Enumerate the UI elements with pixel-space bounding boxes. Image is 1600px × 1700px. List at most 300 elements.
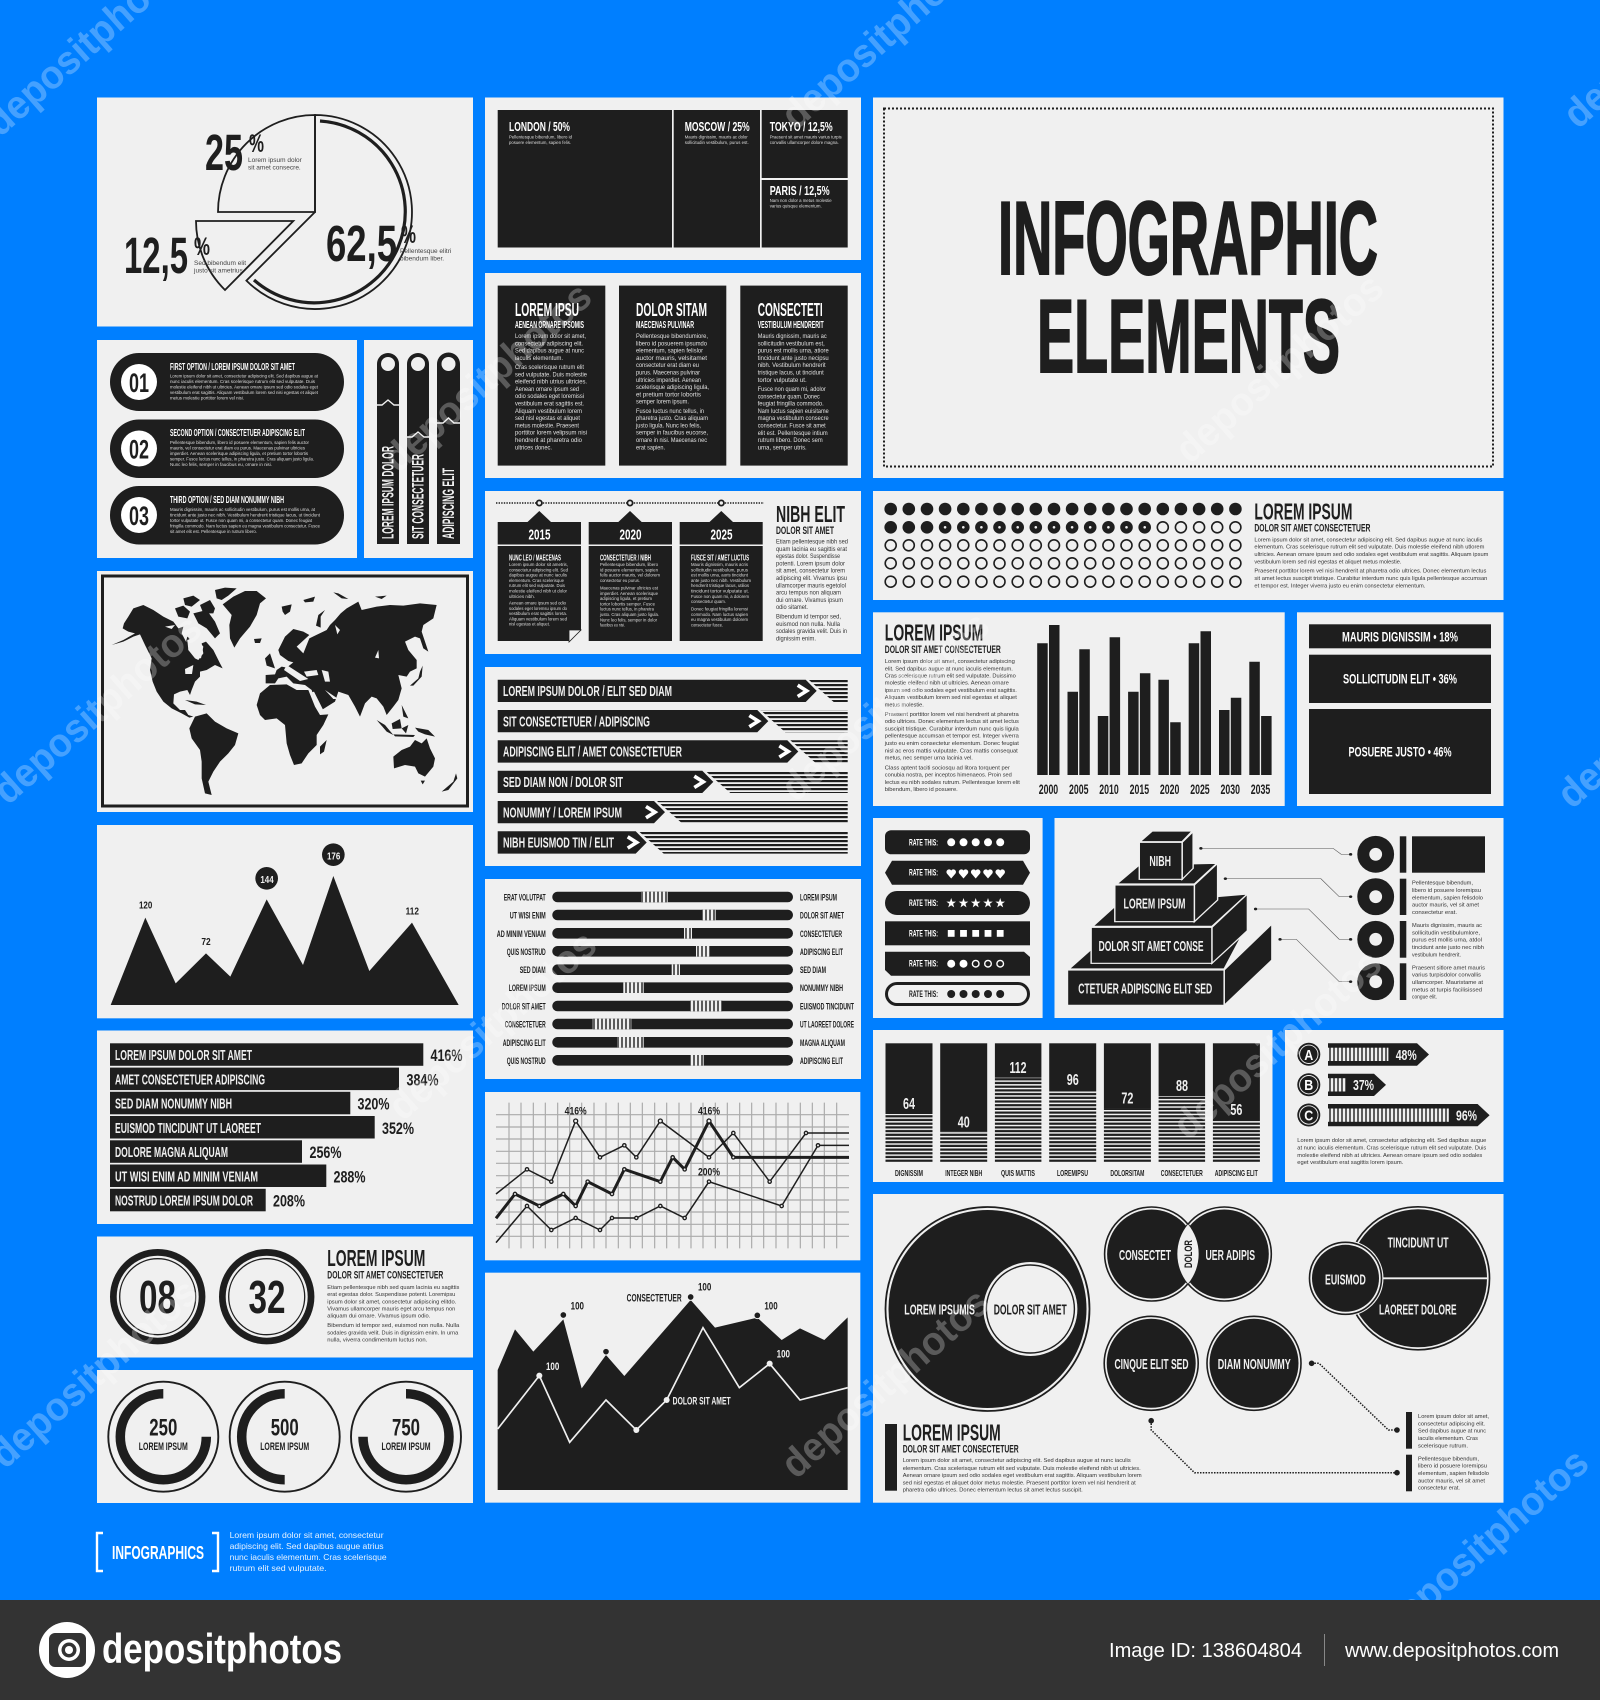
card dolor sitam: purus. Maecenas pulvinar	[636, 370, 701, 376]
slider right labels: EUISMOD TINCIDUNT	[800, 1002, 854, 1012]
option 03: tortor vulputate ut. Fusce non quam mi, a consectetur quam. Donec feugiat	[170, 518, 313, 524]
venn text block: Aenean ornare ipsum sed odio sodales eget vestibulum erat sagittis. Aliquam vestibulum lorem	[903, 1473, 1142, 1479]
arrow row 1: LOREM IPSUM DOLOR / ELIT SED DIAM	[503, 683, 672, 700]
dot matrix text block: Praesent porttitor lorem vel nisi hendrerit at pharetra odio ultrices. Donec elementum lectus	[1254, 569, 1486, 575]
panel: pie chart	[97, 98, 473, 326]
slider hatches	[593, 892, 722, 1066]
area chart labels: DOLOR SIT AMET	[673, 1395, 731, 1407]
slider right labels: MAGNA ALIQUAM	[800, 1038, 845, 1049]
timeline card 2020: 2020	[620, 526, 642, 544]
circle diam: DIAM NONUMMY	[1218, 1356, 1291, 1373]
pyramid notes: sollicitudin vestibulumlore,	[1412, 930, 1480, 936]
overlapping circles	[1105, 1207, 1271, 1301]
line chart labels: 416%	[698, 1106, 720, 1118]
slider right labels: CONSECTETUER	[800, 929, 842, 940]
timeline card 2020: CONSECTETUER / NIBH	[600, 554, 651, 562]
card dolor sitam: pharetra justo. Cras aliquam	[636, 415, 708, 422]
row B: B	[1304, 1077, 1313, 1094]
card lorem ipsu: AENEAN ORNARE IPSOMIS	[515, 320, 584, 331]
panel: venn diagrams	[873, 1194, 1504, 1503]
tab lorem ipsum dolor: LOREM IPSUM DOLOR	[378, 446, 398, 539]
timeline card 2025: hendrerit tristique lacus, utilios	[691, 583, 750, 588]
card dolor sitam: consectetur erat diam eu	[636, 362, 699, 369]
bar values	[273, 1046, 462, 1210]
ring text block: Vivamus ullamcorper mauris eget arcu tempus non	[327, 1306, 455, 1312]
slider right labels: UT LAOREET DOLORE	[800, 1020, 854, 1030]
stock watermarks: depositphotos	[380, 922, 605, 1129]
dotted connector upper	[1309, 1360, 1400, 1433]
footer bar	[0, 1600, 1600, 1700]
row A	[1297, 1043, 1429, 1066]
circle cinque	[1104, 1316, 1198, 1410]
timeline card 2015: 2015	[528, 526, 550, 544]
bar labels: AMET CONSECTETUER ADIPISCING	[115, 1071, 265, 1088]
option 01	[110, 353, 344, 411]
card lorem ipsu: ultrices donec.	[515, 444, 552, 451]
timeline card 2025: consectetur quam.	[691, 599, 726, 604]
arrow row 4: SED DIAM NON / DOLOR SIT	[503, 774, 623, 791]
venn note lower: libero id posuere loremipsu	[1418, 1464, 1487, 1470]
card lorem ipsu: Aenean ornare ipsum sed	[515, 386, 579, 393]
card lorem ipsu: metus molestie. Praesent	[515, 422, 579, 429]
bar labels: DOLORE MAGNA ALIQUAM	[115, 1144, 228, 1161]
line chart labels: 416%	[565, 1106, 587, 1118]
ring text block: nulla, viverra condimentum luctus non.	[327, 1338, 428, 1344]
split circle	[1308, 1207, 1490, 1350]
column chart text block: molestie eleifend nibh ut ultricies. Aenean ornare	[885, 680, 1009, 686]
timeline card 2025: consectetur fusce.	[691, 622, 723, 627]
panel: column pair chart	[873, 612, 1285, 806]
slider right labels: NONUMMY NIBH	[800, 983, 843, 994]
city london	[498, 110, 672, 248]
venn note upper: consectetur adipiscing elit.	[1418, 1421, 1485, 1427]
option 01: 01	[129, 368, 149, 398]
data markers	[536, 1294, 773, 1433]
peak labels: 72	[201, 937, 211, 948]
panel: range sliders	[485, 879, 861, 1079]
card dolor sitam: ultricies imperdiet. Aenean	[636, 377, 701, 384]
split circle: LAOREET DOLORE	[1379, 1301, 1456, 1318]
panel: gauges	[97, 1370, 473, 1503]
line chart labels: 200%	[698, 1166, 720, 1178]
map continents	[112, 588, 457, 795]
pyramid notes: purus est mollis urna, atdol	[1412, 938, 1482, 944]
rating row squares: RATE THIS:	[909, 928, 938, 938]
ring 32	[219, 1249, 314, 1344]
option 01: metus molestie porttitor lorem vel nisi.	[170, 396, 244, 402]
column year labels: 2020	[1160, 781, 1180, 797]
column chart text block: suscipit tristique. Curabitur interdum nunc quis ligula	[885, 726, 1019, 732]
bar values: 416%	[430, 1046, 462, 1065]
slider left labels: CONSECTETUER	[505, 1020, 546, 1030]
timeline card 2025: ante justo nec nibh. Vestibulum	[691, 578, 751, 583]
column pairs	[1037, 625, 1272, 775]
arrow row 3: ADIPISCING ELIT / AMET CONSECTETUER	[503, 744, 682, 761]
card consecteti: tincidunt ante justo necipsu	[758, 355, 829, 362]
venn text block: Lorem ipsum dolor sit amet, consectetur adipiscing elit. Sed dapibus augue at nunc iaculis	[903, 1458, 1131, 1464]
column captions: DOLORSITAM	[1110, 1168, 1144, 1178]
gauge 500: LOREM IPSUM	[260, 1441, 309, 1453]
timeline card 2020: imperdiet. Aenean scelerisque	[600, 591, 658, 596]
pie slice 25 percent	[218, 115, 315, 212]
timeline card 2015: vestibulum erat sagittis loreta.	[509, 611, 567, 616]
venn text block: pharetra odio ultrices. Donec elementum lectus sit amet lectus suscipit.	[903, 1488, 1083, 1494]
gauge 250	[108, 1382, 218, 1492]
column chart text block: Cras scelerisque rutrum elit sed vulputate. Duissimo	[885, 673, 1016, 679]
gauge 750	[351, 1382, 461, 1492]
footer image id: Image ID: 138604804	[1109, 1639, 1302, 1662]
block 36 percent: SOLLICITUDIN ELIT • 36%	[1343, 670, 1457, 686]
column values: 64	[903, 1096, 915, 1113]
card dolor sitam: libero id posuerem ipsumdo	[636, 340, 707, 347]
row A: A	[1304, 1047, 1313, 1064]
ring text block: sodales gravida velit. Duis in dignissim enim. In urna	[327, 1330, 459, 1336]
card consecteti: consectetur quam. Donec	[758, 393, 820, 400]
timeline text block: potenti. Lorem ipsum dolor	[776, 560, 845, 567]
timeline card 2025	[680, 511, 763, 641]
timeline card 2020: tortor lobortis semper. Fusce	[600, 601, 655, 606]
timeline card 2020: id posuere elementum, sapien	[600, 567, 658, 572]
overlapping circles: CONSECTET	[1119, 1247, 1171, 1264]
label 12.5 percent: justo sit ametrius.	[193, 268, 245, 274]
area chart labels: 100	[698, 1282, 711, 1294]
series 1	[496, 1119, 849, 1194]
series 2 thick	[496, 1119, 849, 1218]
bar values: 288%	[334, 1167, 366, 1186]
timeline text block: sit amet, consectetur lorem	[776, 568, 845, 575]
area chart labels: CONSECTETUER	[627, 1292, 682, 1304]
timeline card 2015: molestie eleifend nibh ut dolor	[509, 588, 567, 594]
label 25 percent: sit amet consecre.	[248, 164, 301, 172]
bar labels: LOREM IPSUM DOLOR SIT AMET	[115, 1047, 252, 1064]
option 02: imperdiet. Aenean scelerisque adipiscing ligula, et pretium tortor lobortis	[170, 451, 309, 457]
timeline card 2025: eu magna vestibulum dolorem	[691, 617, 748, 622]
column chart text block: elit. Sed dapibus augue at nunc iaculis elementum.	[885, 666, 1013, 672]
area chart labels	[546, 1282, 790, 1407]
card dolor sitam: ornare in nisi. Maecenas nec	[636, 437, 708, 444]
option 03: 03	[129, 501, 149, 531]
bar values: 384%	[406, 1070, 438, 1089]
overlapping circles: UER ADIPIS	[1206, 1247, 1255, 1264]
large nested circle: DOLOR SIT AMET	[994, 1302, 1067, 1318]
column year labels: 2025	[1190, 781, 1210, 797]
option 03: THIRD OPTION / SED DIAM NONUMMY NIBH	[170, 495, 284, 506]
dotted connector lower	[1148, 1418, 1400, 1475]
timeline text block: DOLOR SIT AMET	[776, 525, 834, 537]
ring 32: 32	[248, 1271, 286, 1323]
pie slice 12.5 percent	[196, 221, 293, 290]
pyramid notes: ullamcorper. Mauristame at	[1412, 980, 1483, 986]
timeline card 2025: est mollis urna, aoris tincidunt	[691, 573, 749, 578]
pyramid notes: vestibulum hendrerit.	[1412, 952, 1461, 958]
card lorem ipsu: eleifend nibh utrius ultricies.	[515, 379, 587, 386]
option 02: semper. Fusce luctus nunc tellus, in pharetra justo. Cras aliquam justo ligula.	[170, 456, 314, 462]
stock watermarks: depositphotos	[773, 603, 998, 810]
arrow row 1	[498, 680, 848, 702]
ring text block: DOLOR SIT AMET CONSECTETUER	[327, 1270, 443, 1282]
bar values: 208%	[273, 1192, 305, 1210]
column year labels: 2030	[1220, 781, 1240, 797]
timeline card 2025: FUSCE SIT / AMET LUCTUS	[691, 554, 749, 562]
card dolor sitam: scelerisque adipiscing ligula,	[636, 384, 709, 391]
bar labels: EUISMOD TINCIDUNT UT LAOREET	[115, 1120, 261, 1137]
card lorem ipsu: Cras scelerisque rutrum elit	[515, 364, 584, 371]
slider right labels: DOLOR SIT AMET	[800, 910, 844, 922]
bar values: 352%	[382, 1119, 414, 1138]
option 02: Nunc leo felis, semper in faucibus eu, ornare in nisi.	[170, 462, 272, 468]
panel: timeline	[485, 491, 861, 654]
block 46 percent	[1309, 709, 1491, 794]
option 01: FIRST OPTION / LOREM IPSUM DOLOR SIT AMET	[170, 362, 295, 373]
donut markers	[1363, 842, 1388, 994]
column chart text block: Aliquam vestibulum lorem sed nisl egestas et aliquet	[885, 695, 1017, 701]
column values: 88	[1176, 1078, 1188, 1095]
tab sit consectetuer: SIT CONSECTETUER	[408, 454, 428, 539]
large nested circle	[886, 1207, 1090, 1411]
column values: 96	[1067, 1072, 1079, 1089]
card lorem ipsu: odio sodales eget loremissi	[515, 393, 584, 400]
gauge 500: 500	[271, 1415, 299, 1442]
bar rows	[110, 1043, 423, 1211]
city tokyo: Praesent sit amet mauris varius turpis	[770, 134, 842, 140]
column year labels: 2000	[1039, 781, 1058, 797]
bar values: 320%	[358, 1094, 390, 1114]
ring 08: 08	[139, 1271, 176, 1323]
row C: 96%	[1456, 1108, 1477, 1124]
stock watermarks: depositphotos	[375, 274, 600, 481]
peak labels: 112	[406, 907, 419, 918]
column chart text block: lectus eu nibh sodales rutrum. Pellentesque lorem elit	[885, 780, 1020, 786]
timeline card 2020: adipiscing ligula, et pretium	[600, 596, 652, 601]
venn text block: sed nisl egestas et aliquet dolor metus molestie. Praesent porttitor lorem vel nisl hendrerit at	[903, 1480, 1136, 1486]
column year labels: 2015	[1130, 781, 1149, 797]
city london: Pellentesque bibendum, libero id	[509, 134, 572, 140]
column chart text block: nisl ac eros mattis vulputate. Cras mattis consequat	[885, 748, 1018, 754]
arrow row 5	[498, 801, 848, 823]
ring text block	[327, 1245, 460, 1344]
pyramid connectors	[1199, 847, 1352, 983]
overlapping circles: DOLOR	[1183, 1240, 1195, 1268]
ring text block: LOREM IPSUM	[327, 1245, 425, 1271]
row B	[1297, 1073, 1386, 1096]
timeline text block: adipiscing elit. Vivamus ipsu	[776, 575, 847, 582]
footer url: www.depositphotos.com	[1344, 1639, 1559, 1662]
label 25 percent: 25	[205, 124, 243, 181]
infographics caption: Lorem ipsum dolor sit amet, consectetur	[230, 1530, 384, 1540]
area chart labels: 100	[571, 1300, 584, 1312]
pyramid shape	[1067, 831, 1272, 1005]
row C	[1297, 1104, 1490, 1126]
column captions	[895, 1168, 1258, 1178]
city moscow: Mauris dignissim, mauris ac dolor	[685, 134, 748, 140]
card consecteti: sollicitudin vestibulum est,	[758, 340, 825, 347]
card dolor sitam: semper lorem ipsum.	[636, 399, 689, 406]
column chart text block	[884, 620, 1020, 793]
column chart text block: ipsum sed odio sodales eget vestibulum erat sagittis.	[885, 688, 1017, 694]
timeline text block: egestas dolor. Suspendisse	[776, 553, 840, 560]
panel: line chart	[485, 1092, 860, 1260]
block 36 percent	[1309, 655, 1491, 703]
timeline text block: sodales gravida velit. Duis in	[776, 628, 847, 635]
timeline card 2015: rutrum elit sed vulputate. Duis	[509, 583, 566, 588]
pyramid labels: LOREM IPSUM	[1124, 895, 1186, 912]
rating row outlined	[886, 984, 1028, 1004]
slider right labels: ADIPISCING ELIT	[800, 1056, 843, 1067]
timeline card 2020: luctus nunc tellus, in pharetra	[600, 607, 654, 612]
card lorem ipsu: vestibulum erat sagittis est.	[515, 400, 584, 408]
arrow row 3	[498, 740, 848, 763]
timeline text block: quam lacinia eu sagittis erat	[776, 546, 847, 553]
card dolor sitam: DOLOR SITAM	[636, 300, 707, 320]
peak labels: 144	[260, 875, 274, 886]
pyramid notes	[1412, 881, 1485, 1001]
timeline text block: arcu tempus non aliquam	[776, 590, 841, 597]
ring text block: Bibendum id tempor sed, euismod non nulla. Nulla	[327, 1323, 460, 1329]
option 03: Mauris dignissim, mauris ac sollicitudin vestibulum, purus est mollis urna, at	[170, 507, 316, 513]
card lorem ipsu: Sed dapibus augue at nunc	[515, 348, 585, 355]
arrow row 4	[498, 771, 848, 793]
venn text block: LOREM IPSUM	[903, 1420, 1001, 1446]
panel: ring counters	[97, 1236, 473, 1358]
slider right labels	[800, 892, 854, 1067]
label 25 percent: %	[249, 130, 264, 158]
bar labels: UT WISI ENIM AD MINIM VENIAM	[115, 1168, 258, 1185]
slider right labels: LOREM IPSUM	[800, 892, 837, 904]
timeline axis	[496, 500, 764, 506]
rating row circles: RATE THIS:	[909, 837, 938, 847]
block 18 percent: MAURIS DIGNISSIM • 18%	[1342, 628, 1458, 644]
card lorem ipsu: sed nisl egestas et aliquet	[515, 415, 580, 422]
dot matrix text block: et tempor est. Integer viverra justo eu enim consectetur elementum.	[1254, 583, 1426, 589]
slider left labels	[497, 892, 546, 1067]
card dolor sitam: justo ligula. Nunc leo felis,	[635, 422, 701, 429]
card dolor sitam: auctor mauris, velsitamet	[636, 355, 707, 362]
timeline card 2020: Nunc leo felis, semper in dolor	[600, 617, 657, 622]
venn note upper: Sed dapibus augue at nunc	[1418, 1429, 1486, 1435]
column captions: ADIPISCING ELIT	[1215, 1168, 1258, 1178]
column year labels	[1039, 781, 1270, 797]
pyramid side bars	[1400, 836, 1485, 1000]
card lorem ipsu: porttitor lorem velipsum nisi	[515, 430, 587, 437]
ring 08	[110, 1249, 205, 1344]
timeline card 2020: consectetur eu purus.	[600, 578, 640, 583]
panel: title	[873, 98, 1504, 478]
option 03: fringilla commodo. Nam luctus sapien eu magna vestibulum consectetur. Fusce	[170, 524, 320, 530]
timeline card 2015: elementum. Cras scelerisque	[509, 578, 564, 583]
timeline card 2015: dapibus augue at nunc iaculis	[509, 573, 568, 578]
series 3	[496, 1144, 849, 1243]
panel: stacked percentage blocks	[1297, 612, 1504, 806]
column chart text block: Class aptent taciti sociosqu ad litora torquent per	[885, 765, 1010, 771]
panel: arrow bars	[485, 667, 861, 866]
timeline card 2025: Mauris dignissim, mauris acris	[691, 562, 749, 567]
pyramid notes: tincidunt ante justo nec nibh	[1412, 945, 1484, 951]
footer logo icon	[39, 1622, 95, 1678]
timeline text block: dui ornare. Vivamus ipsum	[776, 597, 843, 604]
line chart labels	[565, 1106, 720, 1178]
pie slice 62.5 percent	[246, 115, 412, 309]
panel: vertical tabs	[364, 340, 473, 558]
timeline card 2020	[589, 511, 672, 641]
timeline text block: ullamcorper mauris egetolol	[776, 582, 846, 589]
column captions: LOREMIPSU	[1057, 1168, 1088, 1178]
dot matrix text block: elementum. Cras scelerisque rutrum elit sed vulputate. Duis molestie eleifend nibh utlorem	[1254, 545, 1484, 551]
venn note lower: elementum, sapien felisdolo	[1418, 1471, 1490, 1477]
ring text block: Etiam pellentesque nibh sed quam lacinia eu sagittis	[327, 1285, 459, 1291]
card lorem ipsu: consectetur adipiscing elit.	[515, 340, 583, 347]
timeline text block: odio sitamet.	[776, 604, 808, 611]
option 03	[110, 486, 344, 544]
slider left labels: ADIPISCING ELIT	[503, 1038, 546, 1049]
pyramid notes: Praesent sitlore amet mauris	[1412, 965, 1485, 971]
ABC text block: molestie eleifend nibh at ultricies. Aenean ornare ipsum sed odio sodales	[1297, 1153, 1482, 1159]
block 18 percent	[1309, 624, 1491, 648]
card consecteti: rutrum libero. Donec sem	[758, 437, 823, 444]
pyramid labels: DOLOR SIT AMET CONSE	[1099, 938, 1204, 955]
timeline card 2015: consectetur adipiscing elit. Sed	[509, 567, 568, 572]
slider left labels: AD MINIM VENIAM	[497, 929, 546, 940]
infographics caption: rutrum elit sed vulputate.	[230, 1563, 327, 1573]
dot matrix text block: sit amet lectus suscipit tristique. Curabitur interdum nunc quis ligula pellentesque accumsan	[1254, 576, 1487, 582]
timeline card 2015	[498, 511, 581, 642]
gauge 750: LOREM IPSUM	[382, 1441, 430, 1453]
mountain peaks	[111, 876, 459, 1005]
card consecteti: urna, semper utris.	[758, 444, 807, 451]
block 46 percent: POSUERE JUSTO • 46%	[1348, 744, 1452, 760]
city moscow: MOSCOW / 25%	[685, 119, 750, 134]
card consecteti: purus est mollis urna, atiore	[758, 348, 829, 355]
column values	[903, 1060, 1242, 1132]
card lorem ipsu	[498, 286, 605, 466]
card dolor sitam: MAECENAS PULVINAR	[636, 320, 694, 331]
card lorem ipsu: sed vulputate. Duis molestie	[515, 371, 587, 378]
timeline text block: Bibendum id tempor sed,	[776, 614, 841, 620]
ring text block: ipsum dolor sit amet, consectetur adipiscing elitdo.	[327, 1299, 457, 1305]
city paris: PARIS / 12,5%	[770, 183, 830, 198]
timeline card 2025: sollicitudin vestibulum, purus	[691, 567, 749, 572]
card consecteti: tortor vulputate ut.	[758, 377, 807, 384]
slider left labels: QUIS NOSTRUD	[507, 947, 546, 958]
bar values: 256%	[310, 1143, 342, 1162]
infographics caption: nunc iaculis elementum. Cras scelerisque	[230, 1552, 387, 1562]
ABC text block: at nunc iaculis elementum. Cras scelerisque rutrum elit sed vulputate. Duis	[1297, 1146, 1486, 1152]
label 12.5 percent: Sed bibendum elit	[194, 260, 246, 267]
option 01: molestie eleifend nibh ut ultricies. Aenean ornare ipsum sed odio sodales eget	[170, 384, 319, 390]
pyramid notes: libero id posuere loremipsu	[1412, 888, 1481, 894]
pyramid notes: varius turpisdolor convallis	[1412, 973, 1481, 979]
timeline text block: Etiam pellentesque nibh sed	[776, 538, 848, 546]
slider left labels: UT WISI ENIM	[510, 910, 546, 922]
row C: C	[1304, 1108, 1313, 1124]
venn text block: DOLOR SIT AMET CONSECTETUER	[903, 1444, 1019, 1456]
card dolor sitam	[619, 286, 726, 466]
venn note upper: scelerisque rutrum.	[1418, 1443, 1468, 1449]
column captions: QUIS MATTIS	[1001, 1168, 1035, 1178]
arrow row 2	[498, 710, 848, 732]
panel: ABC arrow bars	[1285, 1030, 1504, 1182]
tab adipiscing elit	[437, 352, 460, 544]
timeline text block: dignissim enim.	[776, 635, 816, 642]
column year labels: 2035	[1251, 781, 1270, 797]
card consecteti: elit est. Pellentesque intium	[758, 430, 828, 437]
dot matrix text block: DOLOR SIT AMET CONSECTETUER	[1254, 523, 1370, 535]
column captions: INTEGER NIBH	[945, 1168, 982, 1178]
option 02: Pellentesque bibendum, libero id posuere elementum, sapien felis auctor	[170, 440, 309, 446]
area chart labels: 100	[764, 1300, 778, 1312]
city tokyo: convallis ullamcorper dolore magna.	[770, 140, 839, 146]
rating row partial circles: RATE THIS:	[909, 959, 938, 969]
circle cinque: CINQUE ELIT SED	[1114, 1356, 1189, 1373]
